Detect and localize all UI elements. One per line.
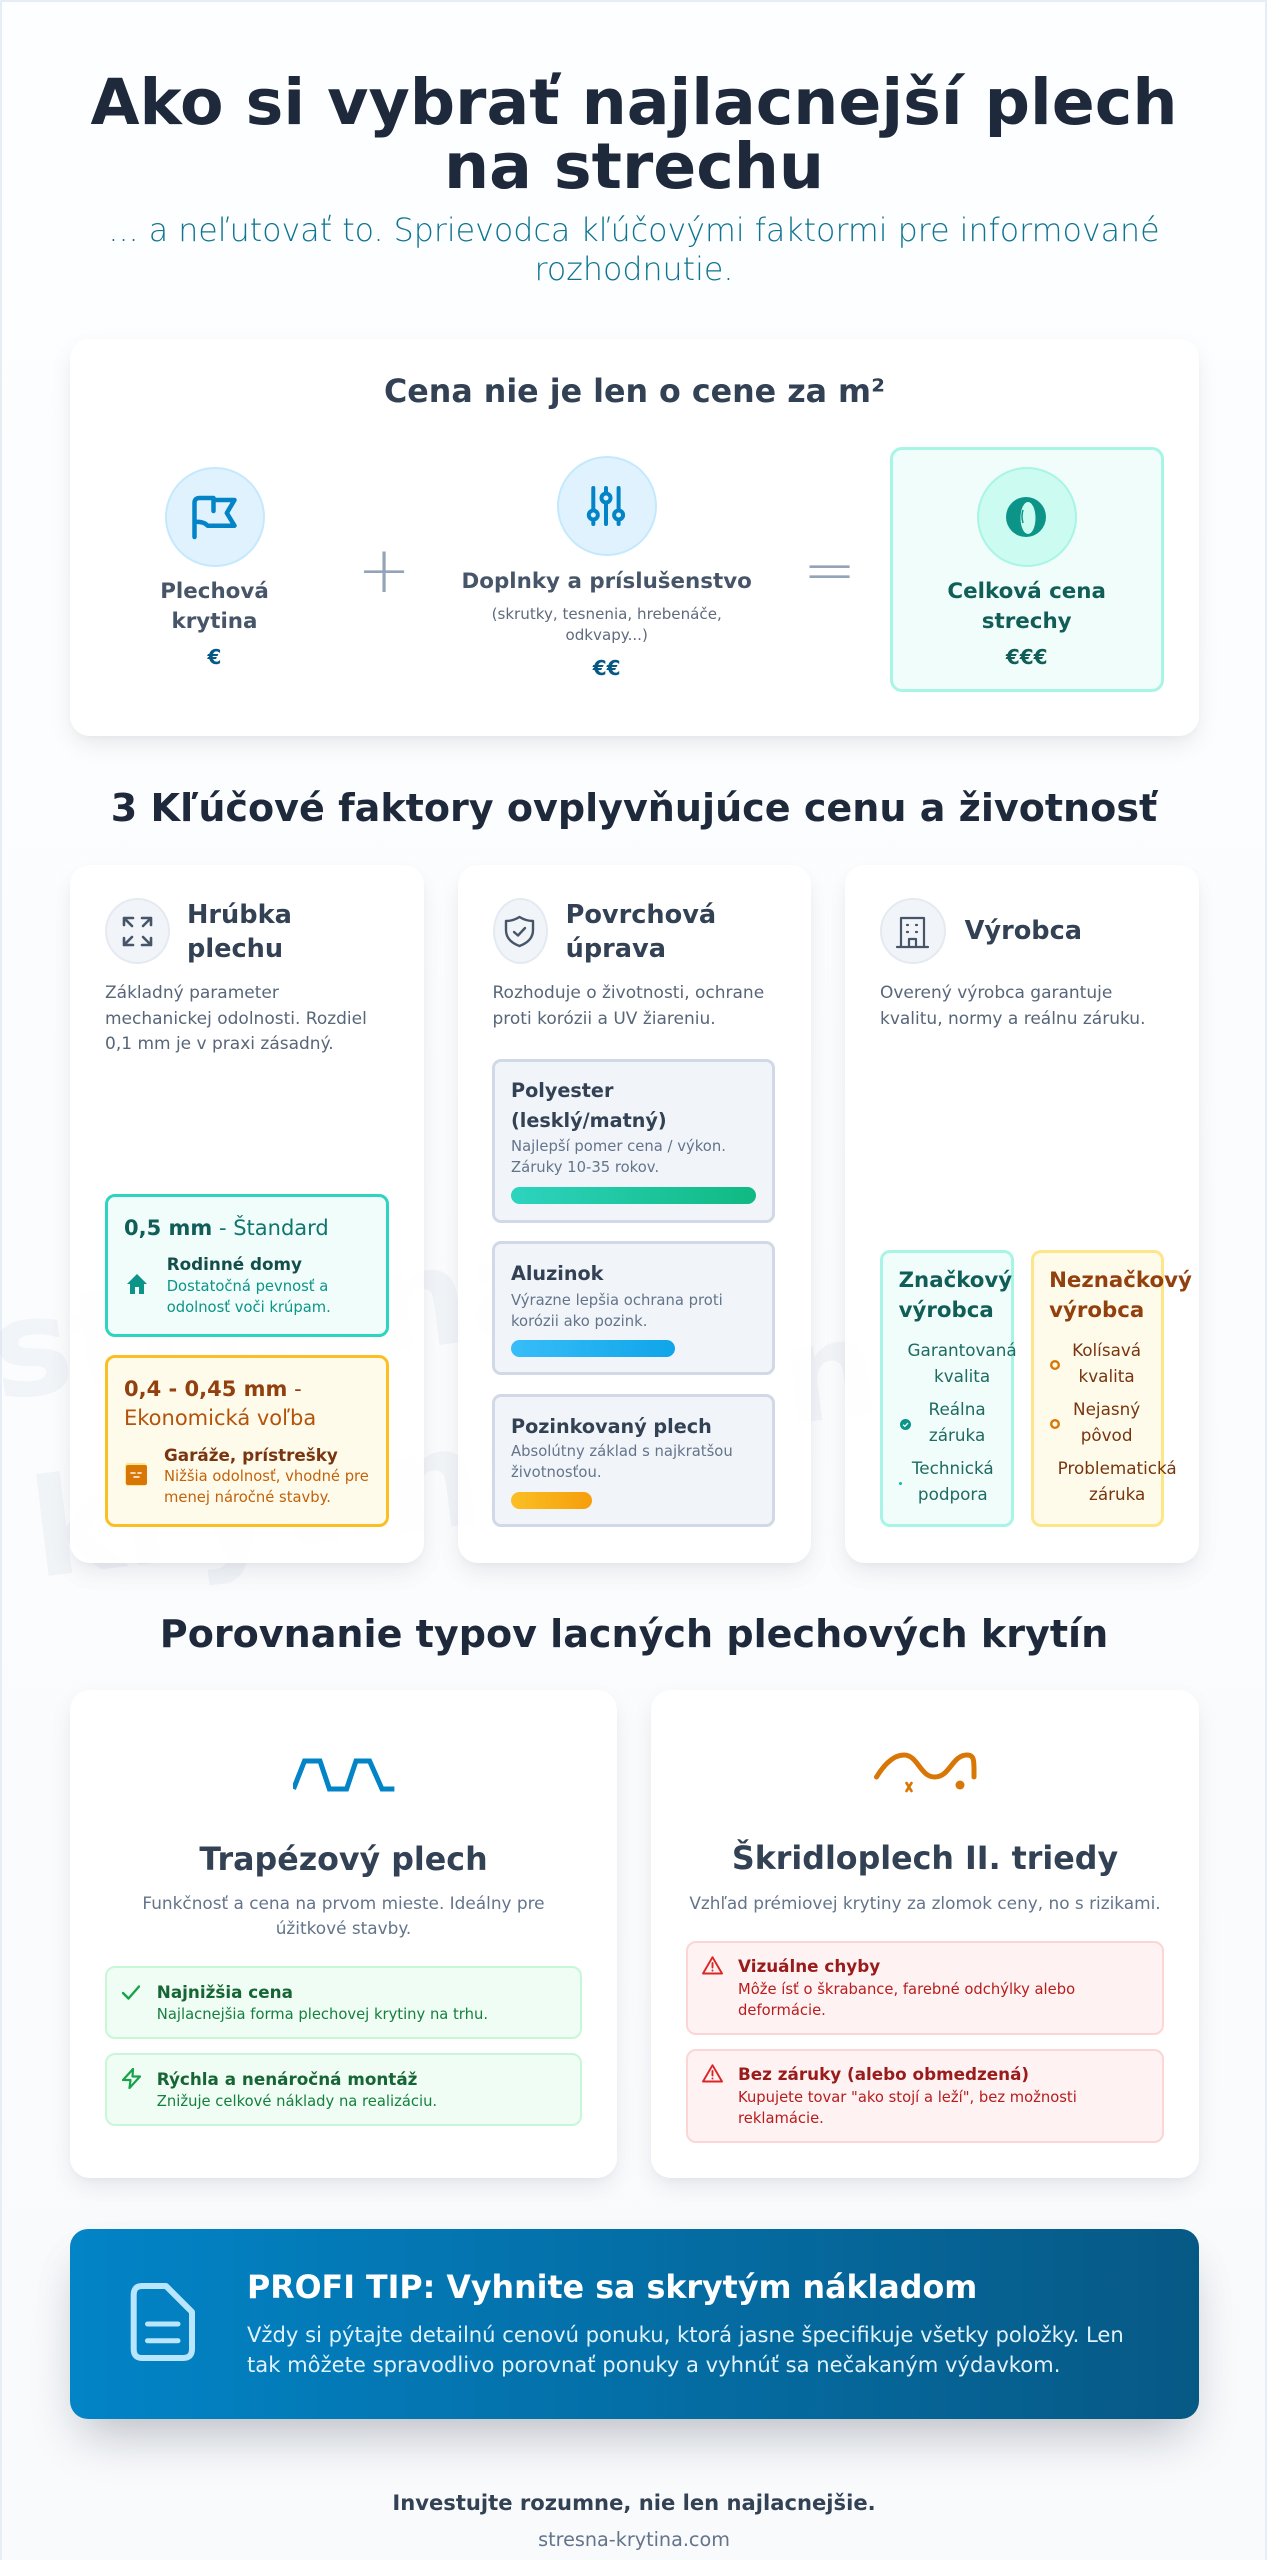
- text: galvanized: [511, 1443, 733, 1481]
- text: family houses: Dostatočná pevnosť a: [167, 1278, 328, 1295]
- heading: economy: Ekonomická voľba: [124, 1406, 316, 1430]
- label: roofing: krytina: [172, 608, 257, 634]
- item: real warranty: Reálna: [929, 1399, 986, 1419]
- bar: galvanized lifespan: [511, 1492, 592, 1509]
- footer site: stresna-krytina.com: [538, 2528, 730, 2550]
- note: accessories: [492, 605, 722, 644]
- note: accessories: odkvapy...): [565, 626, 648, 644]
- item: unclear origin: pôvod: [1081, 1424, 1132, 1444]
- item: unclear origin: [1073, 1399, 1140, 1444]
- text: garages: menej náročné stavby.: [164, 1489, 331, 1506]
- text: galvanized: Absolútny základ s najkratšou: [511, 1443, 733, 1460]
- plus sign: +: [357, 534, 411, 608]
- option: aluzinc: [492, 1241, 775, 1375]
- item: variable quality: Kolísavá: [1072, 1340, 1141, 1360]
- text: family houses: [167, 1278, 331, 1316]
- icon: shield: [492, 898, 548, 964]
- text: manufacturer intro: [880, 983, 1146, 1028]
- text: manufacturer intro: kvalitu, normy a reálnu záruku.: [880, 1008, 1146, 1028]
- text: tile sheet intro: Vzhľad prémiovej krytiny za zlomok ceny, no s rizikami.: [689, 1892, 1161, 1912]
- heading: polyester: Polyester: [511, 1079, 613, 1102]
- text: garages: [164, 1468, 369, 1506]
- item: guaranteed quality: Garantovaná: [908, 1340, 1017, 1360]
- item: unclear origin: Nejasný: [1073, 1399, 1140, 1419]
- icon: expand arrows: [105, 898, 170, 964]
- benefit: lowest price: [105, 1966, 582, 2039]
- footer slogan: Investujte rozumne, nie len najlacnejšie.: [392, 2490, 876, 2514]
- callout: 0.4 mm: [105, 1355, 389, 1527]
- icon: flag: [164, 467, 264, 567]
- equals sign: =: [803, 534, 856, 608]
- heading: standard: 0,5 mm - Štandard: [124, 1216, 329, 1240]
- heading: no warranty: Bez záruky (alebo obmedzená): [738, 2064, 1029, 2084]
- bar: aluzinc lifespan: [511, 1340, 675, 1357]
- item: guaranteed quality: kvalita: [934, 1366, 990, 1386]
- option: galvanized: [492, 1394, 775, 1527]
- text: pro tip: tak môžete spravodlivo porovnať ponuky a vyhnúť sa nečakaným výdavkom.: [247, 2352, 1060, 2377]
- item: real warranty: [929, 1399, 986, 1444]
- watermark: fragment: n: [772, 1288, 887, 1456]
- risk: visual defects: [686, 1941, 1164, 2035]
- text: lowest price: Najlacnejšia forma plechovej krytiny na trhu.: [157, 2006, 488, 2023]
- item: tech support: [912, 1458, 994, 1504]
- label: roofing: Plechová: [160, 578, 269, 604]
- text: polyester: Záruky 10-35 rokov.: [511, 1159, 659, 1176]
- icon: coin: [977, 467, 1077, 567]
- item: tech support: Technická: [912, 1458, 994, 1478]
- heading: comparison: Porovnanie typov lacných plechových krytín: [160, 1612, 1108, 1656]
- icon: dot: [899, 1482, 902, 1484]
- text: trapezoidal intro: úžitkové stavby.: [276, 1918, 411, 1938]
- subtitle: ... a neľutovať to. Sprievodca kľúčovými faktormi pre informované: [108, 213, 1160, 249]
- text: trapezoidal intro: [142, 1892, 545, 1938]
- item: total price: [890, 447, 1164, 692]
- heading: thickness: plechu: [187, 934, 283, 964]
- heading: polyester: [511, 1079, 667, 1132]
- icon: building: [880, 898, 946, 964]
- heading: galvanized: Pozinkovaný plech: [511, 1414, 712, 1438]
- text: thickness intro: mechanickej odolnosti. Rozdiel: [105, 1008, 367, 1028]
- subtitle: rozhodnutie.: [535, 252, 733, 288]
- subtitle: [108, 213, 1160, 288]
- text: pro tip: Vždy si pýtajte detailnú cenovú ponuku, ktorá jasne špecifikuje všetky položky. Len: [247, 2322, 1124, 2347]
- heading: visual defects: Vizuálne chyby: [738, 1956, 880, 1976]
- price: three euro: €€€: [1006, 644, 1048, 668]
- icon: wavy profile: [874, 1752, 977, 1792]
- text: pro tip: [247, 2320, 1124, 2380]
- heading: unbranded: [1049, 1268, 1192, 1323]
- subheading: family houses: Rodinné domy: [167, 1254, 302, 1274]
- title: Ako si vybrať najlacnejší plech: [90, 65, 1178, 139]
- icon: garage: [125, 1463, 147, 1486]
- heading: fast installation: Rýchla a nenáročná montáž: [157, 2068, 417, 2088]
- text: aluzinc: Výrazne lepšia ochrana proti: [511, 1292, 723, 1308]
- text: no warranty: Kupujete tovar "ako stojí a leží", bez možnosti: [738, 2089, 1077, 2106]
- watermark: row two: krytina: [22, 1387, 580, 1609]
- text: galvanized: životnosťou.: [511, 1464, 602, 1481]
- panel: manufacturer: [845, 865, 1199, 1563]
- panel: second-grade tile sheet: [651, 1690, 1199, 2178]
- icon: warning triangle: [702, 1956, 723, 1974]
- text: thickness intro: [105, 983, 367, 1054]
- text: manufacturer intro: Overený výrobca garantuje: [880, 983, 1112, 1003]
- heading: unbranded: výrobca: [1049, 1298, 1144, 1323]
- text: polyester: Najlepší pomer cena / výkon.: [511, 1138, 726, 1155]
- item: problematic warranty: Problematická: [1058, 1458, 1177, 1478]
- callout: 0.5 mm: [105, 1194, 389, 1337]
- text: thickness intro: Základný parameter: [105, 983, 279, 1003]
- panel: trapezoidal sheet: [70, 1690, 617, 2178]
- subheading: garages: Garáže, prístrešky: [164, 1444, 338, 1464]
- text: coating intro: [492, 983, 764, 1028]
- icon: house: [127, 1274, 147, 1294]
- label: total: strechy: [982, 608, 1072, 634]
- bar: polyester lifespan: [511, 1187, 756, 1204]
- heading: tile sheet: Škridloplech II. triedy: [732, 1840, 1118, 1876]
- heading: aluzinc: Aluzinok: [511, 1262, 603, 1284]
- text: garages: Nižšia odolnosť, vhodné pre: [164, 1468, 369, 1485]
- panel: thickness: [70, 865, 424, 1563]
- heading: polyester: (lesklý/matný): [511, 1109, 667, 1132]
- text: aluzinc: [511, 1292, 723, 1330]
- heading: economy: [124, 1377, 316, 1430]
- heading: unbranded: Neznačkový: [1049, 1268, 1192, 1293]
- heading: coating: Povrchová: [566, 900, 716, 930]
- title: [90, 65, 1178, 203]
- text: thickness intro: 0,1 mm je v praxi zásadný.: [105, 1034, 334, 1054]
- item: variable quality: kvalita: [1079, 1366, 1135, 1386]
- heading: thickness: [187, 900, 292, 964]
- icon: trapezoid profile: [293, 1758, 394, 1792]
- heading: manufacturer: Výrobca: [965, 916, 1082, 946]
- heading: pro tip: PROFI TIP: Vyhnite sa skrytým nákladom: [247, 2270, 977, 2306]
- label: total: [947, 578, 1106, 634]
- heading: trapezoidal: Trapézový plech: [199, 1842, 488, 1878]
- icon: warning triangle: [702, 2064, 723, 2083]
- heading: coating: úprava: [566, 934, 666, 964]
- price: one euro: €: [208, 644, 221, 668]
- icon: sliders: [557, 456, 657, 556]
- heading: price: Cena nie je len o cene za m²: [384, 374, 885, 410]
- panel: price equation: [70, 339, 1199, 736]
- heading: brand: výrobca: [899, 1298, 994, 1323]
- price: two euro: €€: [593, 656, 621, 680]
- icon: warning ring: [1050, 1360, 1060, 1370]
- text: aluzinc: korózii ako pozink.: [511, 1312, 647, 1330]
- heading: brand: [899, 1268, 1012, 1323]
- risk: no warranty: [686, 2049, 1164, 2143]
- text: visual defects: [738, 1981, 1075, 2019]
- text: fast installation: Znižuje celkové náklady na realizáciu.: [157, 2093, 437, 2110]
- item: roofing: [160, 467, 269, 668]
- icon: lightning: [122, 2068, 141, 2089]
- heading: brand: Značkový: [899, 1268, 1012, 1293]
- text: polyester: [511, 1138, 726, 1176]
- option: polyester: [492, 1059, 775, 1223]
- item: tech support: podpora: [918, 1484, 988, 1504]
- panel: coating: [458, 865, 811, 1563]
- heading: coating: [566, 900, 716, 964]
- item: accessories: [462, 456, 752, 680]
- text: family houses: odolnosť voči krúpam.: [167, 1299, 331, 1316]
- title: na strechu: [444, 129, 824, 203]
- footer: [334, 2485, 934, 2557]
- item: variable quality: [1072, 1340, 1141, 1386]
- icon: warning ring: [1050, 1419, 1060, 1429]
- item: real warranty: záruka: [929, 1424, 985, 1444]
- text: coating intro: proti korózii a UV žiareniu.: [492, 1008, 716, 1028]
- callout: pro tip: [70, 2229, 1199, 2419]
- text: no warranty: [738, 2087, 1077, 2129]
- callout: brand manufacturer: [880, 1250, 1014, 1527]
- heading: key factors: 3 Kľúčové faktory ovplyvňujúce cenu a životnosť: [111, 786, 1157, 830]
- label: total: Celková cena: [947, 578, 1106, 604]
- label: accessories: Doplnky a príslušenstvo: [462, 569, 752, 594]
- heading: thickness: Hrúbka: [187, 900, 292, 930]
- text: visual defects: deformácie.: [738, 2002, 826, 2019]
- note: accessories: (skrutky, tesnenia, hrebenáče,: [492, 605, 722, 623]
- icon: check badge: [900, 1419, 911, 1430]
- text: trapezoidal intro: Funkčnosť a cena na prvom mieste. Ideálny pre: [142, 1892, 545, 1912]
- benefit: fast installation: [105, 2053, 582, 2126]
- icon: document: [130, 2282, 196, 2362]
- callout: unbranded manufacturer: [1031, 1250, 1164, 1527]
- text: no warranty: reklamácie.: [738, 2110, 824, 2127]
- heading: lowest price: Najnižšia cena: [157, 1982, 293, 2002]
- label: roofing: [160, 578, 269, 634]
- icon: check: [122, 1985, 140, 2000]
- text: visual defects: Môže ísť o škrabance, farebné odchýlky alebo: [738, 1981, 1075, 1998]
- text: coating intro: Rozhoduje o životnosti, ochrane: [492, 983, 764, 1003]
- heading: economy: 0,4 - 0,45 mm -: [124, 1377, 302, 1401]
- item: problematic warranty: záruka: [1089, 1484, 1145, 1504]
- item: guaranteed quality: [908, 1340, 1017, 1386]
- item: problematic warranty: [1058, 1458, 1177, 1504]
